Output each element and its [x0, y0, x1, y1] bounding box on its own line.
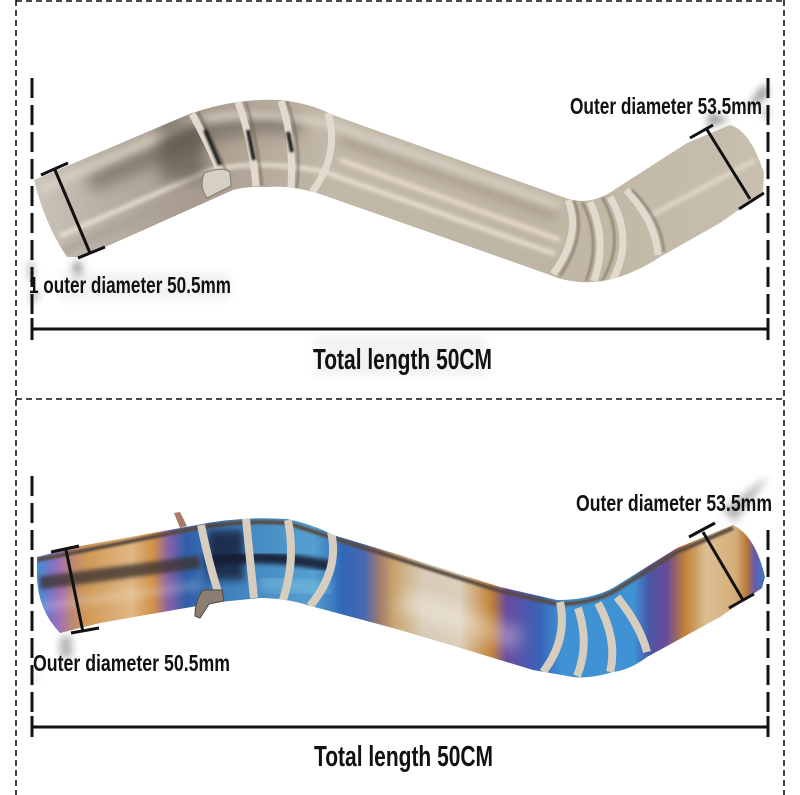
weld seams [201, 518, 647, 676]
total length line [32, 318, 768, 340]
clamp pin [174, 512, 187, 528]
diameter marker left [41, 163, 105, 258]
right dashed limit [766, 78, 770, 318]
left dashed limit [30, 78, 34, 318]
label: total length: Total length 50CM [313, 344, 492, 376]
diameter marker right [690, 125, 764, 209]
weld seams [192, 101, 658, 281]
panel: plain titanium pipe [20, 78, 780, 376]
label: left diameter: 1 outer diameter 50.5mm [29, 272, 231, 298]
label: left diameter: Outer diameter 50.5mm [33, 650, 230, 676]
total length line [32, 716, 768, 737]
smudges [30, 478, 768, 684]
right dashed limit [766, 530, 770, 716]
clamp tab [202, 169, 231, 198]
left dashed limit [30, 476, 34, 716]
pipe: plain body [34, 100, 764, 282]
pipe: coloured body [37, 518, 765, 678]
smudges [29, 84, 768, 304]
clamp hook [195, 590, 224, 618]
panel: burnt titanium pipe [20, 476, 780, 773]
diameter marker left [51, 546, 99, 633]
diameter marker right [689, 523, 754, 608]
label: total length: Total length 50CM [314, 741, 493, 773]
faint text glow [60, 272, 485, 376]
